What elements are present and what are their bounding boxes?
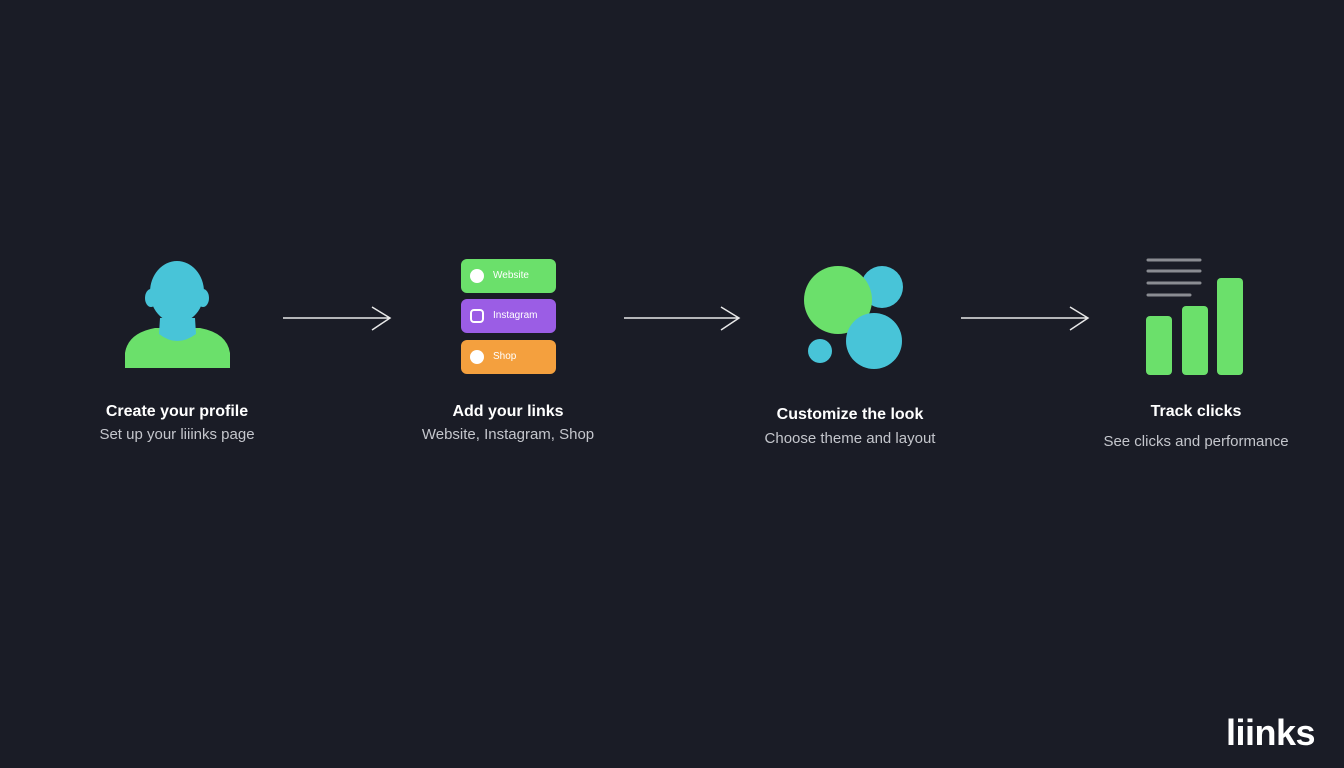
title: add links: Add your links bbox=[452, 403, 564, 420]
arrow 1 bbox=[283, 306, 392, 331]
subtitle: customize: Choose theme and layout bbox=[765, 430, 935, 447]
title: create profile: Create your profile bbox=[106, 403, 248, 420]
title: customize: Customize the look bbox=[777, 406, 923, 423]
button: instagram: Instagram bbox=[493, 310, 537, 321]
subtitle: track clicks: See clicks and performance bbox=[1103, 433, 1289, 450]
arrow 2 bbox=[624, 306, 740, 331]
icon: profile bbox=[125, 261, 230, 368]
button: website bbox=[461, 259, 556, 293]
arrow 3 bbox=[961, 306, 1090, 331]
icon: circles bbox=[804, 266, 903, 369]
logo: liinks bbox=[1226, 712, 1315, 753]
button: instagram bbox=[461, 299, 556, 333]
button: shop bbox=[461, 340, 556, 374]
button: shop: Shop bbox=[493, 351, 516, 362]
button: website: Website bbox=[493, 270, 529, 281]
subtitle: create profile: Set up your liiinks page bbox=[99, 426, 255, 443]
subtitle: add links: Website, Instagram, Shop bbox=[422, 426, 594, 443]
title: track clicks: Track clicks bbox=[1151, 403, 1241, 420]
icon: link buttons bbox=[461, 259, 556, 374]
icon: bar chart bbox=[1146, 258, 1243, 375]
